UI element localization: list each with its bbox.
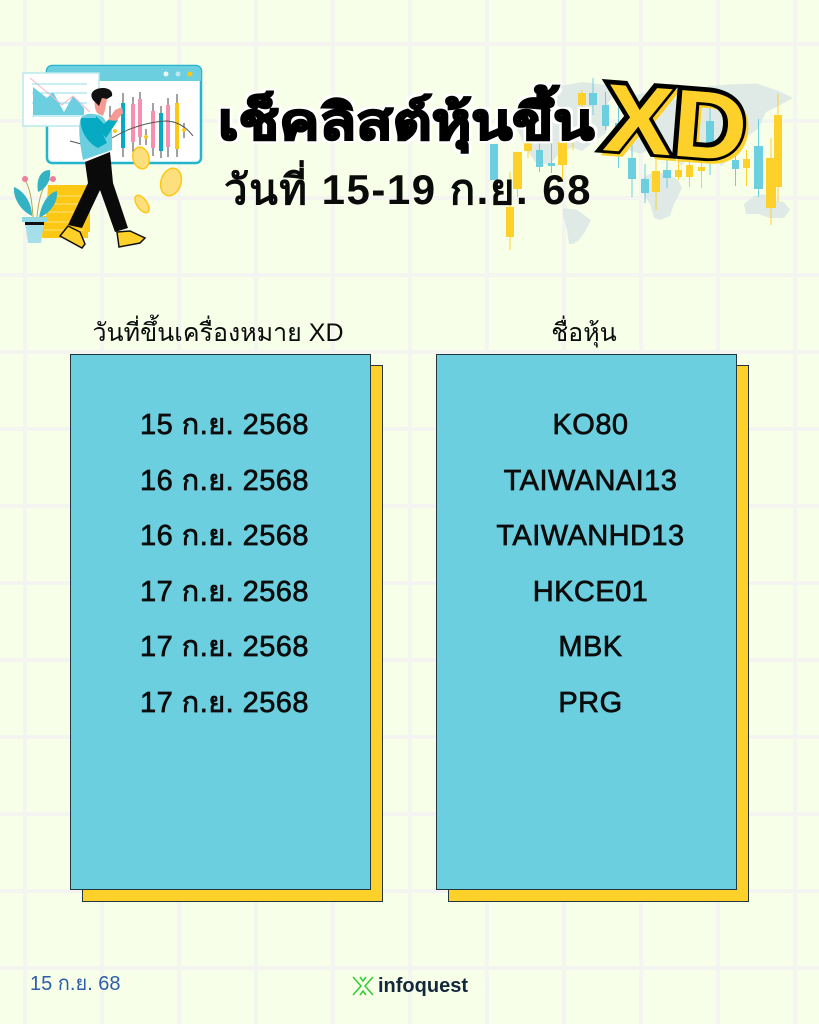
floating coins [130,145,185,215]
panel: dates [70,354,371,890]
date row 3: 16 ก.ย. 2568 [140,520,309,552]
title badge: XD: XD [600,64,751,182]
small area chart card [23,73,99,126]
date row 4: 17 ก.ย. 2568 [140,576,309,608]
potted plant [14,170,57,243]
title: เช็คลิสต์หุ้นขึ้น [218,94,594,150]
man [60,88,145,248]
date row 1: 15 ก.ย. 2568 [140,409,309,441]
stock row 1: KO80 [553,409,628,441]
date row 2: 16 ก.ย. 2568 [140,465,309,497]
title badge: XD: XD [603,68,754,186]
column heading: stock name: ชื่อหุ้น [551,319,617,347]
panel: stocks [436,354,737,890]
stock row 2: TAIWANAI13 [504,465,677,497]
stock row 6: PRG [558,687,623,719]
title badge: XD: XD [599,63,750,181]
logo wordmark: infoquest [378,975,468,997]
date row 5: 17 ก.ย. 2568 [140,631,309,663]
footer date: 15 ก.ย. 68 [30,973,121,995]
coin stack [42,185,90,238]
panel shadow: stocks [448,365,749,902]
stock row 4: HKCE01 [533,576,648,608]
stock row 3: TAIWANHD13 [496,520,685,552]
column heading: date: วันที่ขึ้นเครื่องหมาย XD [92,319,344,347]
subtitle: วันที่ 15-19 ก.ย. 68 [224,166,592,213]
panel shadow: dates [82,365,383,902]
stock row 5: MBK [558,631,623,663]
date row 6: 17 ก.ย. 2568 [140,687,309,719]
chart window [47,66,201,163]
